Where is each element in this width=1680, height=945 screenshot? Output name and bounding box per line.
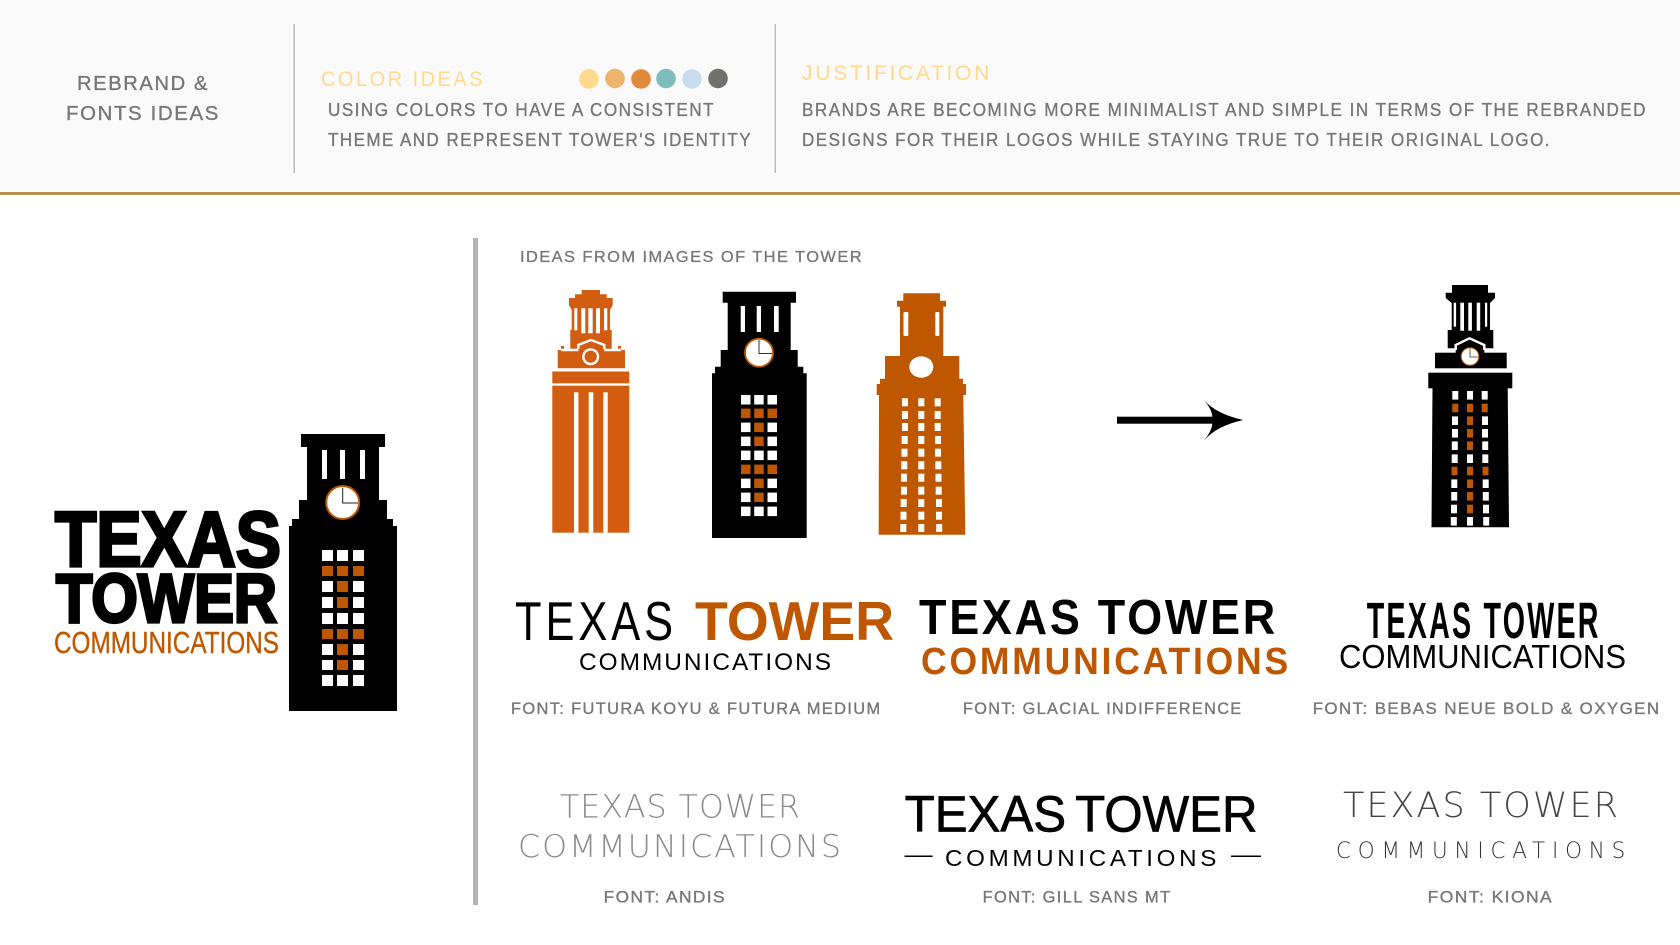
heading: rebrand and fonts ideas: REBRAND & bbox=[77, 73, 209, 95]
font option: Gill Sans MT: COMMUNICATIONS bbox=[945, 845, 1220, 871]
color ideas text: USING COLORS TO HAVE A CONSISTENT bbox=[328, 99, 715, 120]
justification text bbox=[802, 99, 1647, 150]
font option: Gill Sans MT: TEXAS TOWER bbox=[905, 786, 1258, 843]
final tower icon bbox=[1428, 285, 1512, 527]
font option: Kiona: COMMUNICATIONS bbox=[1336, 839, 1632, 864]
font option: Futura Koyu and Futura Medium: TEXAS bbox=[515, 590, 677, 652]
vertical divider bbox=[473, 238, 478, 905]
font option: Andis: COMMUNICATIONS bbox=[518, 829, 843, 865]
tower idea 3: solid orange bbox=[877, 293, 966, 535]
logo wordmark: COMMUNICATIONS bbox=[54, 625, 279, 660]
heading: rebrand and fonts ideas: FONTS IDEAS bbox=[66, 103, 220, 125]
color palette swatches bbox=[579, 69, 728, 89]
color ideas heading: COLOR IDEAS bbox=[321, 68, 485, 91]
logo wordmark bbox=[54, 495, 281, 660]
font option: Glacial Indifference: COMMUNICATIONS bbox=[921, 641, 1291, 683]
tower idea 2: black with clock bbox=[712, 292, 807, 538]
justification text: DESIGNS FOR THEIR LOGOS WHILE STAYING TRUE TO THEIR ORIGINAL LOGO. bbox=[802, 129, 1551, 150]
logo tower icon bbox=[289, 434, 397, 711]
font option: Andis: TEXAS TOWER bbox=[560, 788, 801, 826]
font option: Bebas Neue Bold and Oxygen: FONT: BEBAS NEUE BOLD & OXYGEN bbox=[1313, 699, 1660, 718]
font option: Andis bbox=[518, 788, 843, 906]
logo wordmark: TEXAS bbox=[55, 495, 281, 583]
color ideas text bbox=[328, 99, 752, 150]
font option: Gill Sans MT: FONT: GILL SANS MT bbox=[983, 888, 1171, 907]
arrow bbox=[1117, 400, 1243, 441]
font option: Andis: FONT: ANDIS bbox=[604, 888, 726, 906]
font option: Glacial Indifference bbox=[919, 591, 1291, 718]
tower idea 1: orange columns bbox=[552, 290, 629, 533]
font option: Futura Koyu and Futura Medium: FONT: FUTURA KOYU & FUTURA MEDIUM bbox=[511, 699, 882, 718]
font option: Kiona: FONT: KIONA bbox=[1428, 888, 1553, 907]
font option: Glacial Indifference: FONT: GLACIAL INDIFFERENCE bbox=[963, 699, 1242, 718]
font option: Gill Sans MT bbox=[905, 786, 1261, 907]
font option: Kiona: TEXAS TOWER bbox=[1343, 786, 1620, 826]
header band bbox=[0, 0, 1680, 195]
section heading: ideas from images: IDEAS FROM IMAGES OF THE TOWER bbox=[520, 249, 863, 266]
font option: Kiona bbox=[1336, 786, 1632, 907]
font option: Futura Koyu and Futura Medium bbox=[511, 590, 894, 718]
justification heading: JUSTIFICATION bbox=[802, 62, 992, 85]
primary logo bbox=[54, 434, 397, 711]
font option: Futura Koyu and Futura Medium: COMMUNICATIONS bbox=[579, 649, 833, 676]
font option: Bebas Neue Bold and Oxygen: COMMUNICATIONS bbox=[1339, 638, 1626, 675]
font option: Futura Koyu and Futura Medium: TOWER bbox=[695, 590, 894, 652]
heading: rebrand and fonts ideas bbox=[66, 73, 220, 125]
logo wordmark: TOWER bbox=[56, 560, 277, 637]
font option: Bebas Neue Bold and Oxygen bbox=[1313, 592, 1660, 718]
font option: Glacial Indifference: TEXAS TOWER bbox=[919, 591, 1278, 645]
color ideas text: THEME AND REPRESENT TOWER'S IDENTITY bbox=[328, 129, 752, 150]
